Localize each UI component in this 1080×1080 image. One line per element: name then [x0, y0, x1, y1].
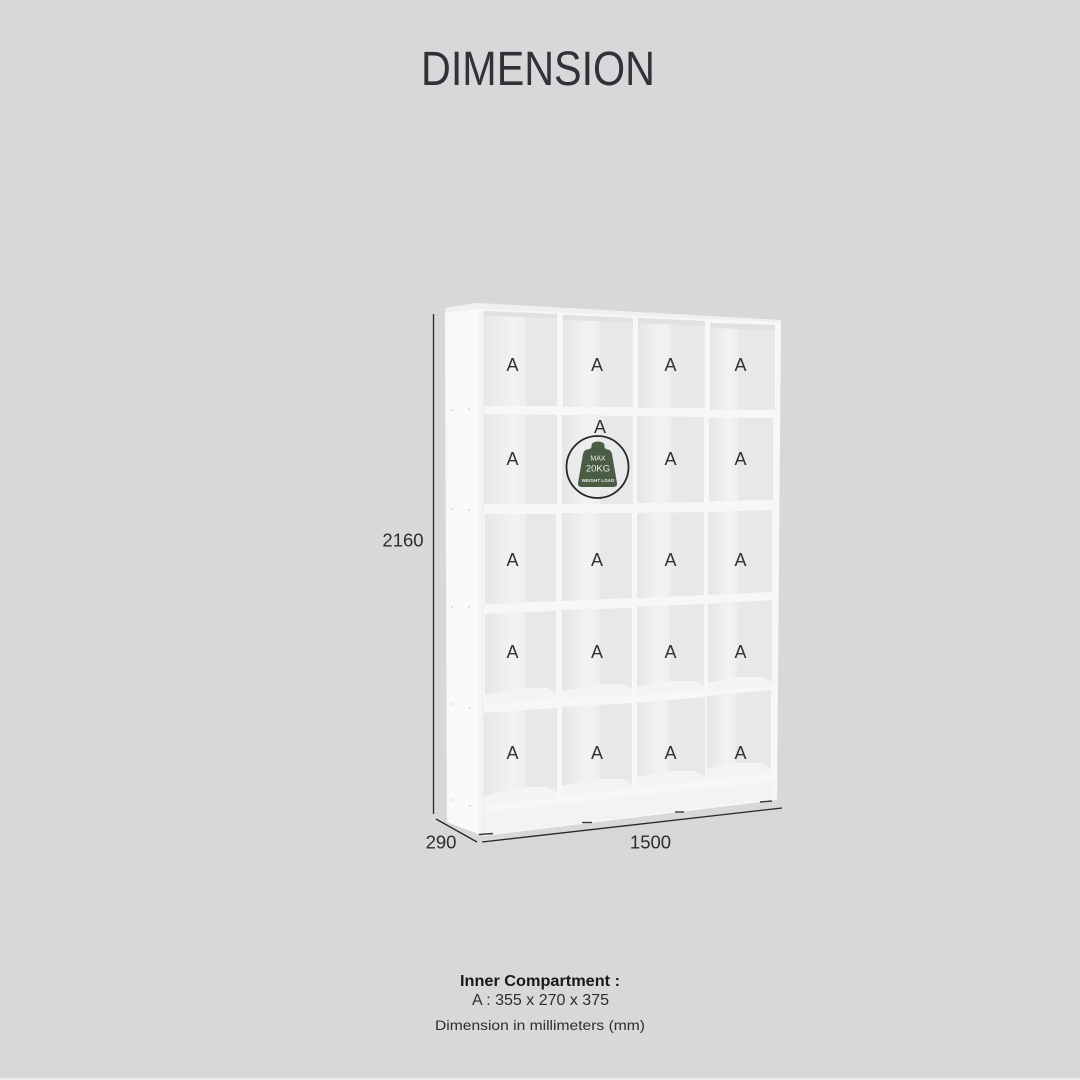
icon: max 20kg weight load badge: WEIGHT LOAD — [582, 478, 615, 483]
compartment labels A: A — [734, 550, 747, 570]
icon: max 20kg weight load badge — [566, 436, 628, 498]
inner compartment note — [435, 973, 645, 1033]
compartment labels A: A — [591, 550, 603, 570]
compartment labels A: A — [734, 355, 747, 375]
compartment labels A: A — [594, 417, 606, 437]
icon: max 20kg weight load badge: MAX — [590, 456, 606, 462]
compartment labels A: A — [664, 743, 677, 763]
compartment labels A: A — [734, 743, 747, 763]
height dimension: 2160 — [382, 530, 424, 550]
width dimension — [482, 808, 782, 852]
compartment labels A: A — [506, 550, 519, 570]
compartment labels A: A — [664, 449, 677, 469]
compartment back wall shading — [484, 311, 738, 805]
side panel peg holes — [451, 408, 471, 807]
top surface — [445, 303, 781, 322]
inner compartment note: Inner Compartment : — [460, 973, 620, 990]
shelf body — [445, 303, 781, 836]
compartment ceilings in top row — [484, 311, 775, 330]
depth dimension: 290 — [426, 832, 456, 852]
compartment labels A: A — [591, 355, 603, 375]
inner compartment note: Dimension in millimeters (mm) — [435, 1017, 645, 1033]
compartment labels A: A — [664, 550, 677, 570]
compartment labels A: A — [506, 743, 519, 763]
compartment labels A: A — [591, 743, 603, 763]
compartment labels A: A — [506, 355, 519, 375]
icon: max 20kg weight load badge: 20KG — [586, 464, 610, 474]
feet marks — [479, 801, 772, 834]
compartment floors — [484, 677, 772, 805]
compartment labels A: A — [506, 642, 519, 662]
side panel — [445, 309, 484, 836]
compartment labels A: A — [734, 642, 747, 662]
compartment labels A — [506, 355, 747, 763]
compartment labels A: A — [591, 642, 603, 662]
bookshelf — [445, 303, 781, 836]
plinth — [484, 781, 773, 835]
compartment labels A: A — [664, 355, 677, 375]
width dimension: 1500 — [630, 832, 671, 852]
title: DIMENSION — [421, 43, 655, 96]
compartment labels A: A — [734, 449, 747, 469]
compartment labels A: A — [506, 449, 519, 469]
compartment labels A: A — [664, 642, 677, 662]
depth dimension — [426, 819, 477, 852]
inner compartment note: A : 355 x 270 x 375 — [472, 992, 609, 1009]
